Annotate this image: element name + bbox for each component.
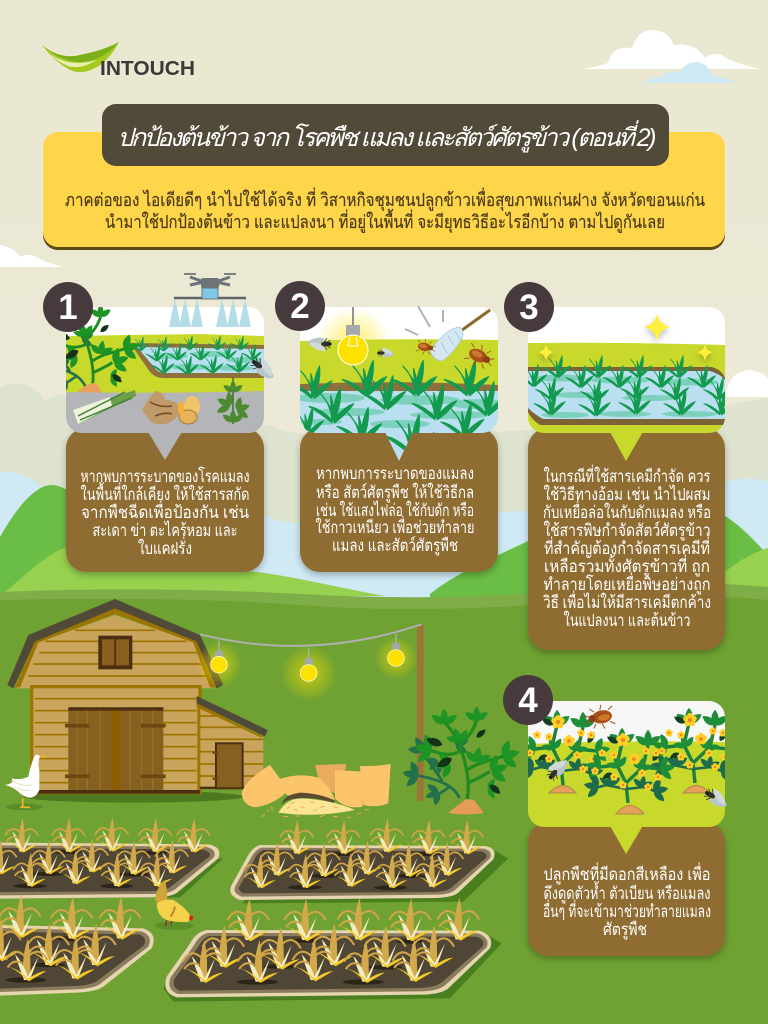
barn	[7, 599, 268, 794]
panel: step 3	[504, 282, 735, 650]
step 3 text box: วิธี เพื่อไม่ให้มีสารเคมีตกค้าง	[543, 590, 711, 612]
title	[102, 104, 669, 166]
number 3	[504, 282, 554, 332]
goose	[5, 755, 48, 810]
icon: sticky mop	[405, 306, 490, 361]
step 1 text box: ในพื้นที่ใกล้เคียง ให้ใช้สารสกัด	[80, 482, 250, 504]
number 4: 4	[518, 681, 538, 720]
ground	[0, 583, 768, 1024]
cloud: top right blue	[640, 62, 738, 83]
icon: insects	[542, 703, 732, 812]
lemongrass	[73, 390, 136, 424]
number 1	[43, 282, 93, 332]
intro panel	[43, 132, 725, 250]
barn shadow	[23, 791, 243, 803]
herb sprig	[217, 378, 250, 424]
step 1 text box: หากพบการระบาดของโรคแมลง	[80, 466, 250, 486]
barn window	[98, 636, 132, 669]
number 2: 2	[290, 287, 310, 326]
panel: step 2	[275, 281, 510, 572]
cloud: right	[726, 370, 768, 397]
step 1 text box: จากพืชฉีดเพื่อป้องกัน เช่น	[81, 500, 249, 522]
field: bottom right	[163, 898, 502, 1002]
step 4 text box: ปลูกพืชที่มีดอกสีเหลือง เพื่อ	[544, 862, 710, 885]
number 1: 1	[58, 288, 78, 327]
step 1 text box: สะเดา ข่า ตะไคร้หอม และ	[92, 520, 238, 540]
step 4 text box	[528, 822, 725, 956]
title: ปกป้องต้นข้าว จาก โรคพืช แมลง และสัตว์ศัตรูข้าว (ตอนที่ 2)	[118, 120, 656, 153]
step 1 text box: ใบแคฝรั่ง	[138, 536, 192, 558]
number 3: 3	[519, 288, 539, 327]
icon: fly	[247, 353, 280, 384]
field: bottom left	[0, 895, 154, 996]
step 2 text box: หากพบการระบาดของแมลง	[316, 464, 474, 483]
bush beside fields	[400, 707, 524, 814]
intro text	[65, 187, 705, 233]
step 3 text box: ใช้วิธีทางอ้อม เช่น นำไปผสม	[544, 484, 710, 504]
ginger and galangal	[142, 391, 200, 424]
cloud: left	[0, 245, 64, 267]
step 4 text box: ดึงดูดตัวห้ำ ตัวเบียน หรือแมลง	[544, 881, 710, 904]
string lights	[196, 624, 424, 801]
step 2 illustration	[300, 307, 498, 461]
step 2 text box	[300, 428, 498, 572]
rice fields	[0, 817, 508, 1002]
field: top left	[0, 817, 223, 899]
background: pale hills	[0, 384, 768, 600]
step 3 text box: เหลือรวมทั้งศัตรูข้าวที่ ถูก	[544, 554, 710, 577]
step 3 text box: ใช้สารพิษกำจัดสัตว์ศัตรูข้าว	[544, 520, 710, 541]
logo swoosh	[42, 42, 119, 72]
background: green hills	[0, 485, 768, 600]
step 4 text box: ศัตรูพืช	[603, 920, 647, 940]
step 2 text box: แมลง และสัตว์ศัตรูพืช	[332, 536, 458, 556]
rice sacks and grain	[242, 764, 391, 817]
barn door	[65, 707, 166, 790]
step 3 text box: กับเหยื่อล่อในกับดักแมลง หรือ	[543, 500, 711, 522]
barn side shed	[197, 696, 268, 789]
icon: insects	[307, 336, 498, 373]
farm scene	[5, 599, 424, 817]
step 2 text box: ใช้กาวเหนียว เพื่อช่วยทำลาย	[316, 515, 474, 537]
background: blue sky band	[0, 472, 768, 600]
step 3 text box: ทำลายโดยเหยื่อพิษอย่างถูก	[544, 572, 710, 595]
number 4	[503, 675, 553, 725]
number 2	[275, 281, 325, 331]
cloud: top right white	[581, 30, 760, 69]
step 3 text box: ที่สำคัญต้องกำจัดสารเคมีที่	[544, 536, 710, 558]
step 3 text box: ในแปลงนา และต้นข้าว	[564, 610, 690, 630]
logo wordmark: INTOUCH	[100, 58, 195, 80]
icon: drone spraying	[169, 274, 251, 327]
chicken	[155, 880, 194, 930]
step 3 illustration	[528, 307, 725, 461]
panel: step 1	[32, 274, 280, 572]
step 3 text box: ในกรณีที่ใช้สารเคมีกำจัด ควร	[544, 464, 710, 486]
step 2 text box: เช่น ใช้แสงไฟล่อ ใช้กับดัก หรือ	[316, 500, 474, 520]
icon: light bulb trap	[338, 307, 368, 365]
panel: step 4	[503, 675, 745, 956]
step 4 illustration	[528, 701, 725, 854]
field: top right	[230, 818, 508, 903]
logo	[42, 42, 195, 80]
intro text: นำมาใช้ปกป้องต้นข้าว และแปลงนา ที่อยู่ในพื้นที่ จะมียุทธวิธีอะไรอีกบ้าง ตามไปดูกันเลย	[105, 209, 665, 233]
step 3 text box	[528, 428, 725, 650]
icon: sparkles	[538, 314, 713, 361]
step 1 text box	[66, 428, 264, 572]
step 1 illustration	[66, 307, 264, 460]
step 2 text box: หรือ สัตว์ศัตรูพืช ให้ใช้วิธีกล	[316, 482, 474, 503]
